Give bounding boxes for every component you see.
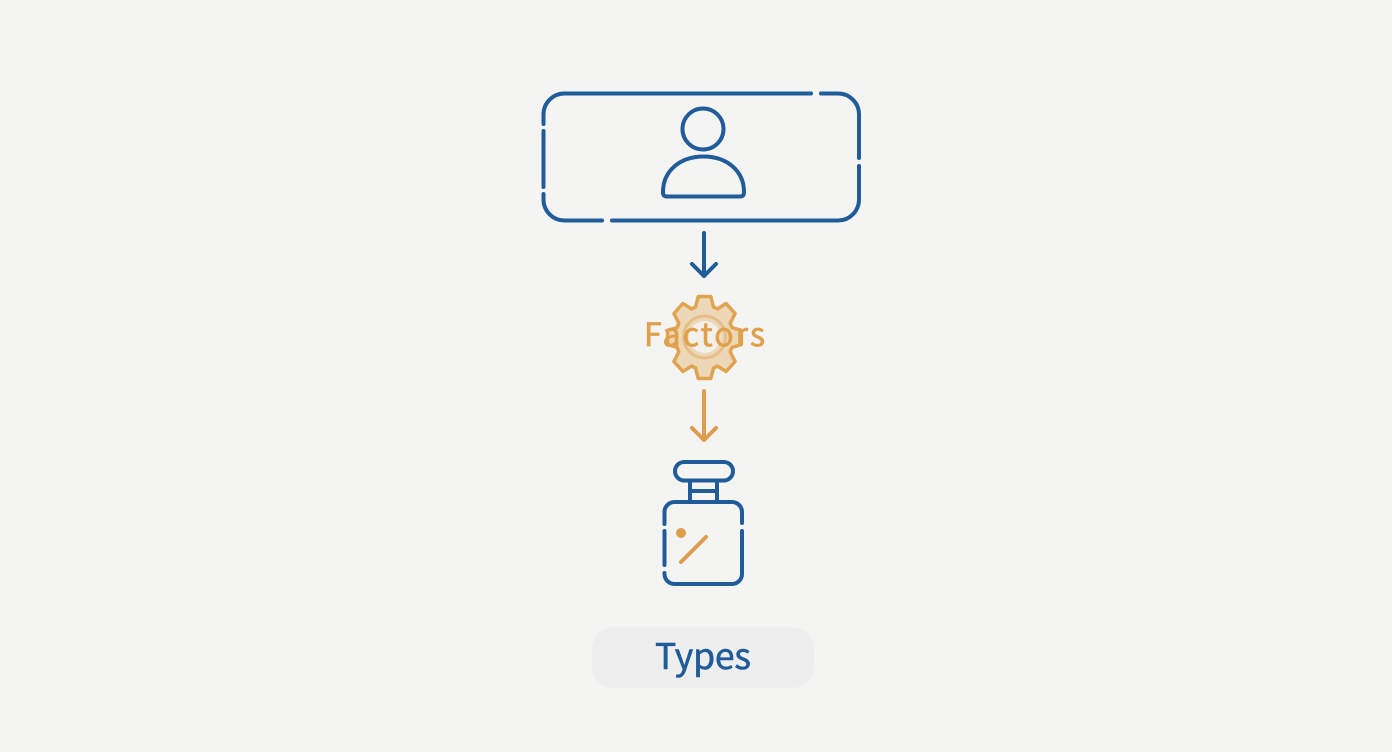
panel: person box — [544, 93, 859, 221]
icon: percent mark — [678, 530, 706, 562]
label: Factors: Factors — [644, 310, 765, 356]
label: Types: Types — [655, 629, 751, 680]
icon: bottle — [664, 462, 742, 584]
arrow: person to factors — [692, 233, 716, 276]
arrow: factors to types — [692, 391, 716, 440]
icon: factors gear — [668, 296, 741, 378]
icon: person — [663, 108, 744, 196]
panel: Types pill — [592, 627, 814, 688]
